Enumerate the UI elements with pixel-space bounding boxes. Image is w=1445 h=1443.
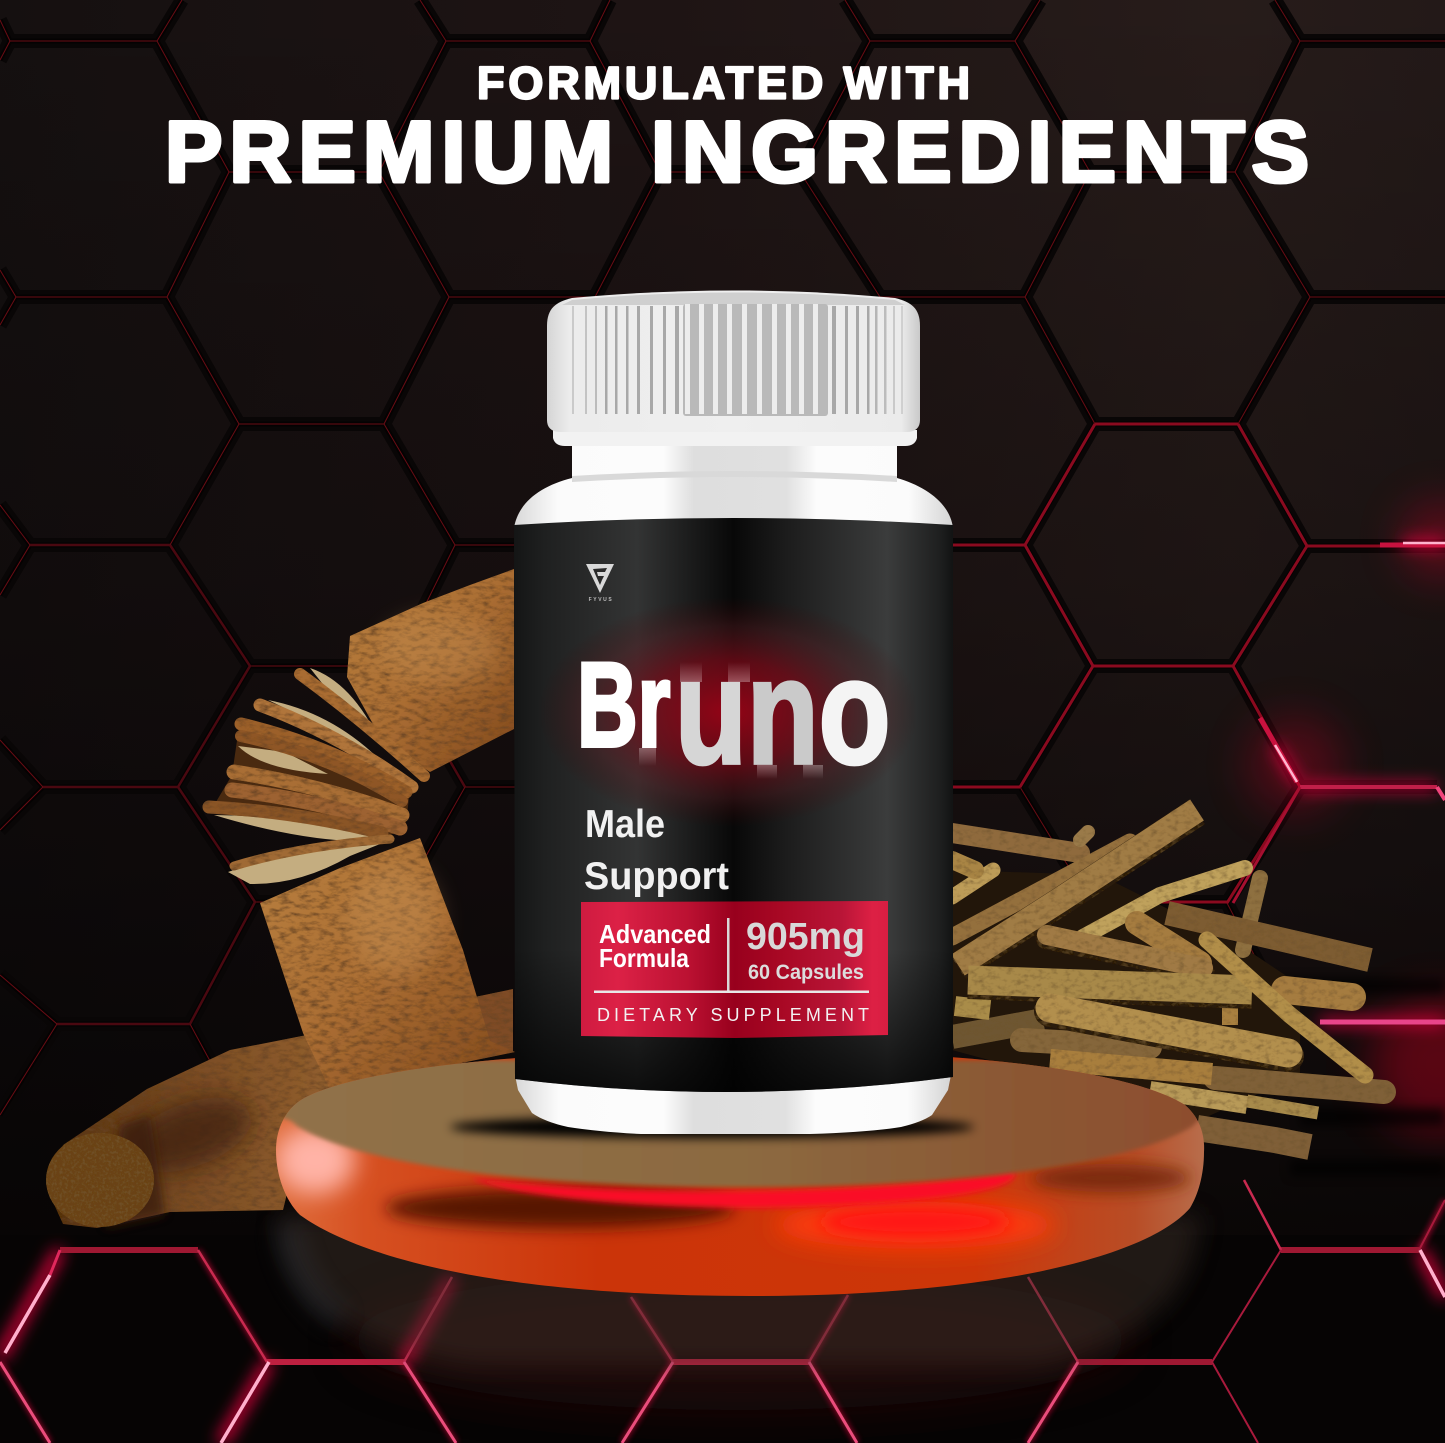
label red glow [538, 597, 918, 827]
root shading [105, 615, 500, 1228]
name ghost reflections [639, 662, 823, 779]
ingredient: dried ashwagandha roots (right) [952, 810, 1384, 1147]
podium shaded band [385, 1188, 735, 1228]
root slices: bark rims [209, 674, 424, 866]
subtitle [584, 803, 729, 898]
podium red hot spot [820, 1207, 1010, 1237]
lower root [47, 1035, 340, 1228]
podium orange halo [775, 1201, 1055, 1249]
subtitle: Male [585, 803, 665, 846]
podium right dark band [1030, 1164, 1190, 1192]
title [165, 58, 1309, 200]
red info box [581, 901, 888, 1038]
podium red streak [470, 1172, 1015, 1208]
red info box: DIETARY SUPPLEMENT [597, 1005, 869, 1025]
red info box: Formula [599, 943, 689, 973]
product name [577, 627, 891, 795]
bottle cap [547, 290, 920, 432]
shadows cast behind the right pile [1240, 978, 1445, 1176]
podium top surface [280, 1060, 1205, 1187]
red info box: Advanced [599, 919, 711, 949]
root pile backing [952, 870, 1300, 1120]
root slices: pale faces [214, 668, 395, 884]
bottle shoulder and neck [514, 440, 953, 528]
bottle [514, 290, 953, 1134]
subtitle: Support [584, 855, 729, 898]
brand logo: FYVUS [589, 597, 613, 603]
trunk [260, 838, 515, 1090]
product name: Br [577, 637, 670, 771]
platform: round copper podium [270, 1040, 1210, 1300]
root slices: dark gaps between slices [210, 720, 410, 838]
bottle shadow on podium [450, 1116, 974, 1138]
neon glow: right side hexagon edges [1233, 502, 1445, 1135]
platform reflection [280, 1215, 1200, 1365]
ingredient: cassava root pieces (left) [46, 569, 515, 1228]
bottle base [515, 1075, 951, 1134]
cap centre panel [683, 304, 828, 416]
upper root [347, 569, 514, 772]
podium pale left highlight [275, 1126, 355, 1194]
root cut end [46, 1133, 154, 1227]
bottle label [514, 518, 953, 1092]
neon floor: bottom hexagon grid [0, 1180, 1445, 1443]
red info box: 905mg [746, 916, 865, 958]
brand logo [586, 564, 614, 603]
branch behind trunk [470, 989, 513, 1060]
red info box: 60 Capsules [748, 961, 864, 984]
cap ribs [572, 306, 903, 414]
title line 1: FORMULATED WITH [477, 58, 970, 108]
title line 2: PREMIUM INGREDIENTS [165, 104, 1309, 200]
product name: uno [675, 627, 891, 795]
bottle neck ring [553, 430, 917, 446]
